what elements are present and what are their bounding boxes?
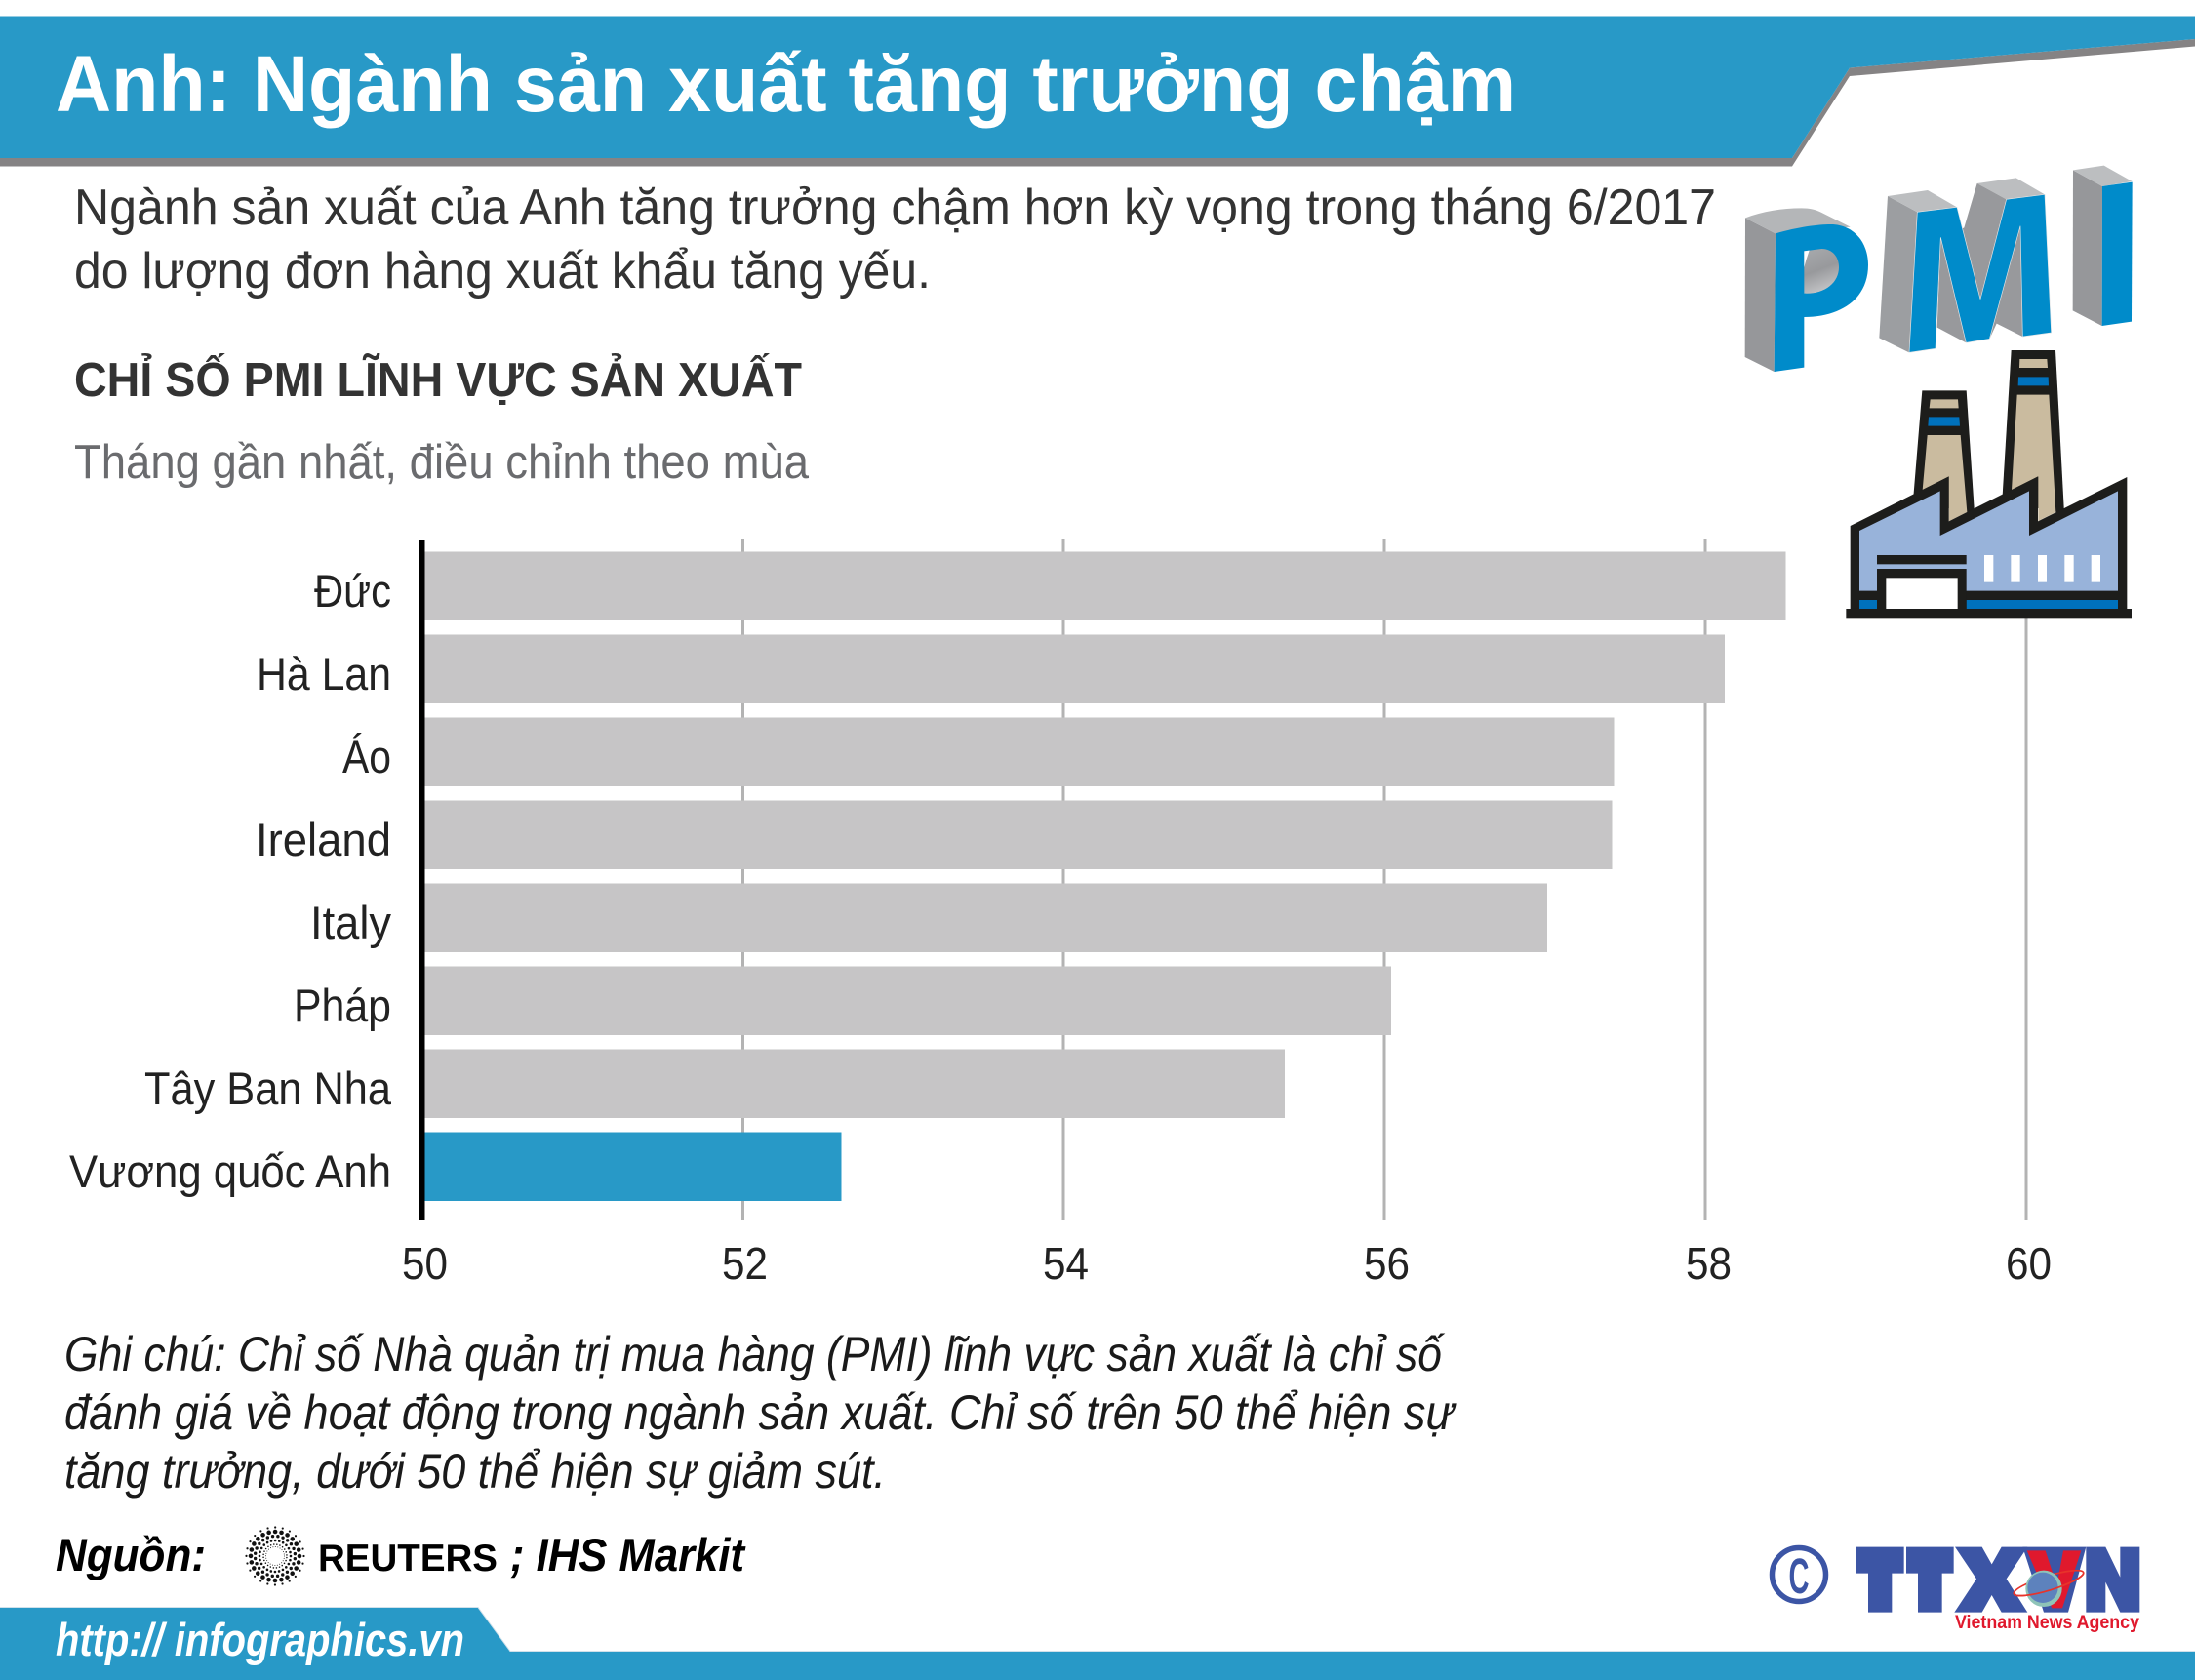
country labels: Áo bbox=[342, 731, 391, 782]
bar: Đức bbox=[424, 552, 1785, 620]
country labels: Đức bbox=[314, 565, 391, 617]
footer url: http:// infographics.vn bbox=[56, 1614, 464, 1665]
chart subtitle: Tháng gần nhất, điều chỉnh theo mùa bbox=[74, 436, 810, 489]
letter I bbox=[2073, 166, 2133, 326]
source line: REUTERS bbox=[318, 1538, 498, 1580]
note text: đánh giá về hoạt động trong ngành sản xuất. Chỉ số trên 50 thể hiện sự bbox=[64, 1385, 1457, 1440]
note text: tăng trưởng, dưới 50 thể hiện sự giảm sút. bbox=[64, 1444, 886, 1499]
axis values: 56 bbox=[1364, 1238, 1410, 1289]
factory building bbox=[1846, 476, 2132, 618]
right chimney bbox=[2002, 350, 2064, 521]
axis values: 60 bbox=[2006, 1238, 2052, 1289]
source line: ; IHS Markit bbox=[510, 1529, 746, 1580]
left chimney bbox=[1913, 390, 1975, 521]
bar: Hà Lan bbox=[424, 634, 1725, 703]
icon: Reuters logo dots bbox=[246, 1528, 304, 1584]
bar: Vương quốc Anh bbox=[424, 1132, 841, 1201]
footer band bbox=[0, 1608, 2195, 1680]
bar chart: PMI by country bbox=[69, 539, 2052, 1289]
country labels: Ireland bbox=[256, 814, 391, 865]
icon: copyright mark: C bbox=[1789, 1548, 1809, 1604]
axis values: 50 bbox=[402, 1238, 448, 1289]
bar: Ireland bbox=[424, 800, 1612, 869]
letter P bbox=[1745, 208, 1868, 372]
country labels: Hà Lan bbox=[257, 648, 391, 700]
intro text bbox=[74, 180, 1716, 300]
axis values bbox=[402, 1238, 2052, 1289]
header banner bbox=[0, 16, 2195, 166]
icon: 3D PMI letters bbox=[1745, 166, 2133, 372]
bar: Tây Ban Nha bbox=[424, 1050, 1285, 1118]
country labels: Italy bbox=[310, 897, 391, 948]
logo: TTXVN Vietnam News Agency: Vietnam News Agency bbox=[1955, 1613, 2139, 1633]
axis values: 52 bbox=[722, 1238, 768, 1289]
note text bbox=[64, 1327, 1457, 1499]
country labels: Vương quốc Anh bbox=[69, 1145, 391, 1197]
intro text: do lượng đơn hàng xuất khẩu tăng yếu. bbox=[74, 243, 931, 300]
vertical axis bbox=[419, 540, 425, 1220]
chart heading: CHỈ SỐ PMI LĨNH VỰC SẢN XUẤT bbox=[74, 353, 802, 407]
icon: copyright mark bbox=[1772, 1547, 1826, 1604]
axis values: 58 bbox=[1686, 1238, 1732, 1289]
bar: Áo bbox=[424, 718, 1614, 786]
logo: TTXVN Vietnam News Agency bbox=[1856, 1547, 2139, 1633]
intro text: Ngành sản xuất của Anh tăng trưởng chậm hơn kỳ vọng trong tháng 6/2017 bbox=[74, 180, 1716, 236]
icon: factory bbox=[1846, 350, 2132, 618]
letter M bbox=[1879, 178, 2052, 352]
source line bbox=[56, 1528, 746, 1584]
note text: Ghi chú: Chỉ số Nhà quản trị mua hàng (PMI) lĩnh vực sản xuất là chỉ số bbox=[64, 1327, 1446, 1381]
country labels: Tây Ban Nha bbox=[144, 1062, 392, 1114]
country labels: Pháp bbox=[294, 980, 391, 1031]
source line: Nguồn: bbox=[56, 1529, 206, 1580]
country labels bbox=[69, 565, 392, 1197]
bar: Italy bbox=[424, 884, 1547, 952]
title: Anh: Ngành sản xuất tăng trưởng chậm bbox=[56, 40, 1516, 129]
axis values: 54 bbox=[1043, 1238, 1089, 1289]
bar: Pháp bbox=[424, 966, 1391, 1035]
